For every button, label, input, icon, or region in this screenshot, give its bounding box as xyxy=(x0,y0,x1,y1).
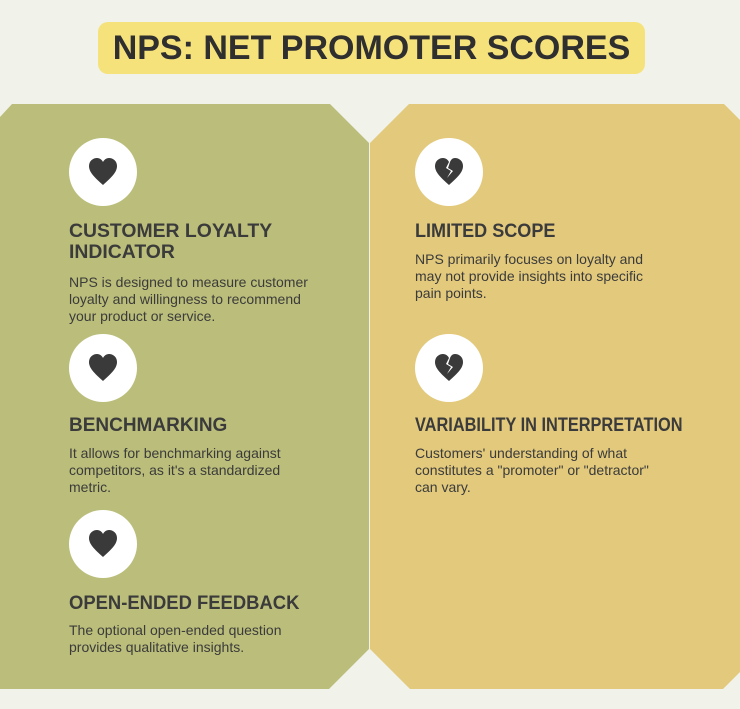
heading: open-ended: OPEN-ENDED FEEDBACK xyxy=(69,593,299,614)
heading: customer loyalty: CUSTOMER LOYALTY xyxy=(69,221,272,242)
text: benchmarking: competitors, as it's a standardized xyxy=(69,462,280,478)
text: limited scope: NPS primarily focuses on loyalty and xyxy=(415,251,643,267)
panel: advantages xyxy=(69,138,308,655)
title xyxy=(98,22,645,74)
text: limited scope xyxy=(415,251,643,301)
text: benchmarking: It allows for benchmarking against xyxy=(69,445,281,461)
title: NPS: NET PROMOTER SCORES xyxy=(113,29,630,67)
text: customer loyalty: NPS is designed to measure customer xyxy=(69,274,308,290)
heading: benchmarking: BENCHMARKING xyxy=(69,415,227,436)
icon: heart 3 xyxy=(69,510,137,578)
heading: variability: VARIABILITY IN INTERPRETATION xyxy=(415,415,683,436)
text: limited scope: pain points. xyxy=(415,285,487,301)
text: open-ended xyxy=(69,622,282,655)
text: customer loyalty: loyalty and willingness to recommend xyxy=(69,291,301,307)
text: variability: Customers' understanding of what xyxy=(415,445,627,461)
heading: customer loyalty xyxy=(69,221,272,263)
text: benchmarking xyxy=(69,445,281,495)
text: customer loyalty xyxy=(69,274,308,324)
text: benchmarking: metric. xyxy=(69,479,111,495)
text: customer loyalty: your product or service. xyxy=(69,308,215,324)
text: open-ended: The optional open-ended question xyxy=(69,622,282,638)
heading: customer loyalty: INDICATOR xyxy=(69,242,175,263)
icon: heart 2 xyxy=(69,334,137,402)
icon: broken heart 2 xyxy=(415,334,483,402)
text: limited scope: may not provide insights into specific xyxy=(415,268,643,284)
panel: limitations xyxy=(415,138,683,495)
icon: heart 1 xyxy=(69,138,137,206)
text: variability: can vary. xyxy=(415,479,471,495)
text: open-ended: provides qualitative insights. xyxy=(69,639,244,655)
icon: broken heart 1 xyxy=(415,138,483,206)
heading: limited scope: LIMITED SCOPE xyxy=(415,221,555,242)
text: variability: constitutes a "promoter" or "detractor" xyxy=(415,462,649,478)
text: variability xyxy=(415,445,649,495)
